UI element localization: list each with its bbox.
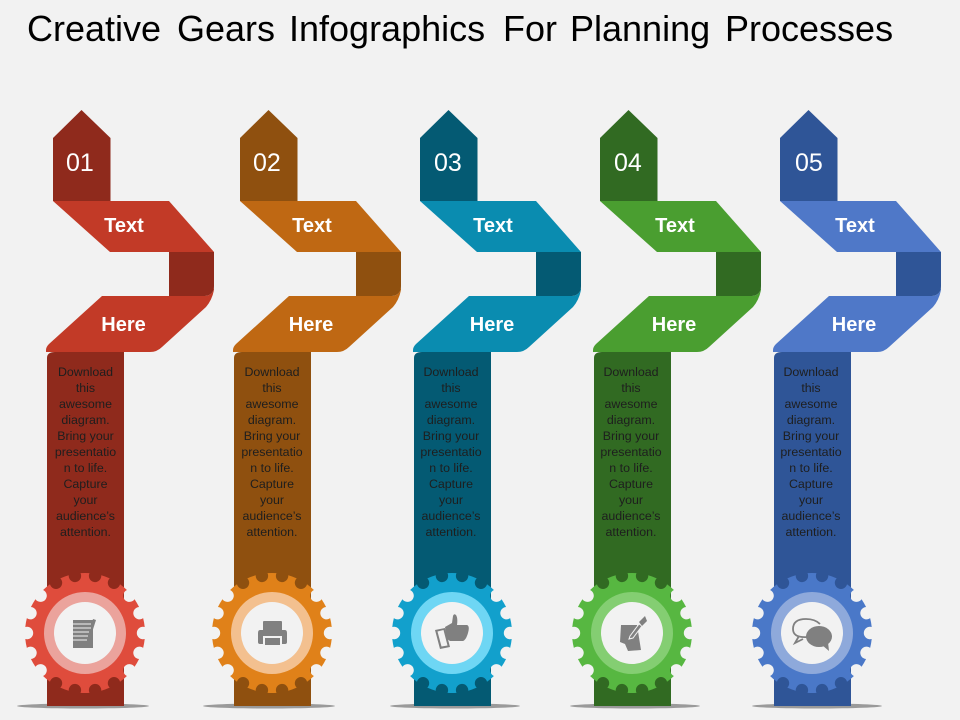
ribbon 04 (593, 110, 761, 706)
body text 01: Capture (63, 477, 108, 491)
body text 03: diagram. (427, 413, 475, 427)
label: Here: Here (832, 314, 876, 336)
body text 04: diagram. (607, 413, 655, 427)
icon: notepad and pen (73, 619, 96, 648)
body text 03: n to life. (429, 461, 473, 475)
body text 03: this (441, 381, 461, 395)
title: Infographics (289, 8, 485, 49)
ribbon 05 (773, 110, 941, 706)
body text 01: n to life. (64, 461, 107, 475)
body text 02: Download (244, 365, 300, 379)
panel: step 05 (752, 110, 941, 708)
gear 02 (212, 573, 332, 693)
body text 02: audience’s (242, 509, 302, 523)
floor shadow 01 (17, 704, 149, 708)
icon: paper and pen (620, 616, 647, 651)
body text 02: awesome (245, 397, 299, 411)
number 02: 02 (253, 149, 281, 177)
label: Here: Here (289, 314, 333, 336)
floor shadow 05 (752, 704, 882, 708)
body text 03: awesome (424, 397, 478, 411)
label: Here: Here (652, 314, 696, 336)
body text 02: Capture (250, 477, 294, 491)
body text 04: Capture (609, 477, 653, 491)
title: Creative (27, 8, 161, 49)
body text 05: awesome (784, 397, 838, 411)
label: Text: Text (835, 215, 875, 237)
body text 03: audience’s (421, 509, 481, 523)
body text 05: your (799, 493, 823, 507)
body text 01: diagram. (61, 413, 110, 427)
body text 04: Download (603, 365, 659, 379)
body text 05: attention. (786, 525, 836, 539)
body text 03: attention. (426, 525, 476, 539)
body text 01: Bring your (57, 429, 114, 443)
panel: step 03 (390, 110, 581, 708)
body text 03: Capture (429, 477, 473, 491)
body text 04: this (621, 381, 641, 395)
panel: step 01 (17, 110, 214, 708)
floor shadow 04 (570, 704, 700, 708)
body text 02: attention. (247, 525, 297, 539)
body text 01: awesome (59, 397, 112, 411)
body text 01: presentatio (55, 445, 116, 459)
label: Here: Here (101, 314, 146, 336)
body text 03: Download (423, 365, 479, 379)
floor shadow 02 (203, 704, 335, 708)
number 03: 03 (434, 149, 462, 177)
body text 01: Download (58, 365, 113, 379)
label: Text: Text (104, 215, 144, 237)
body text 01: this (76, 381, 95, 395)
label: Text: Text (292, 215, 332, 237)
label: Here: Here (470, 314, 514, 336)
body text 01: audience’s (56, 509, 115, 523)
body text 01: attention. (60, 525, 111, 539)
body text 05: n to life. (789, 461, 833, 475)
body text 03: Bring your (423, 429, 479, 443)
body text 01: your (73, 493, 98, 507)
gear 01 (25, 573, 145, 693)
title: Processes (725, 8, 893, 49)
gear 04 (572, 573, 692, 693)
body text 04: Bring your (603, 429, 659, 443)
body text 05: Download (783, 365, 839, 379)
gear 03 (392, 573, 512, 693)
body text 05: diagram. (787, 413, 835, 427)
title: For (503, 8, 557, 49)
body text 04: audience’s (601, 509, 661, 523)
panel: step 02 (203, 110, 401, 708)
title: Gears (177, 8, 275, 49)
icon: thumbs up (435, 614, 469, 649)
ribbon 01 (46, 110, 214, 706)
label: Text: Text (655, 215, 695, 237)
number 05: 05 (795, 149, 823, 177)
body text 02: Bring your (244, 429, 300, 443)
body text 05: this (801, 381, 821, 395)
body text 02: n to life. (250, 461, 294, 475)
icon: speech bubbles (793, 619, 832, 651)
ribbon 02 (233, 110, 401, 706)
floor shadow 03 (390, 704, 520, 708)
body text 04: presentatio (600, 445, 662, 459)
panel: step 04 (570, 110, 761, 708)
ribbon 03 (413, 110, 581, 706)
body text 03: your (439, 493, 463, 507)
body text 04: your (619, 493, 643, 507)
gear 05 (752, 573, 872, 693)
label: Text: Text (473, 215, 513, 237)
icon: printer (258, 621, 287, 645)
body text 04: attention. (606, 525, 656, 539)
body text 02: this (262, 381, 282, 395)
body text 05: audience’s (781, 509, 841, 523)
number 04: 04 (614, 149, 642, 177)
body text 03: presentatio (420, 445, 482, 459)
body text 02: diagram. (248, 413, 296, 427)
body text 02: presentatio (241, 445, 303, 459)
title: Planning (570, 8, 710, 49)
body text 02: your (260, 493, 284, 507)
number 01: 01 (66, 149, 94, 177)
body text 04: n to life. (609, 461, 653, 475)
body text 05: Capture (789, 477, 833, 491)
body text 05: Bring your (783, 429, 839, 443)
body text 04: awesome (604, 397, 658, 411)
body text 05: presentatio (780, 445, 842, 459)
